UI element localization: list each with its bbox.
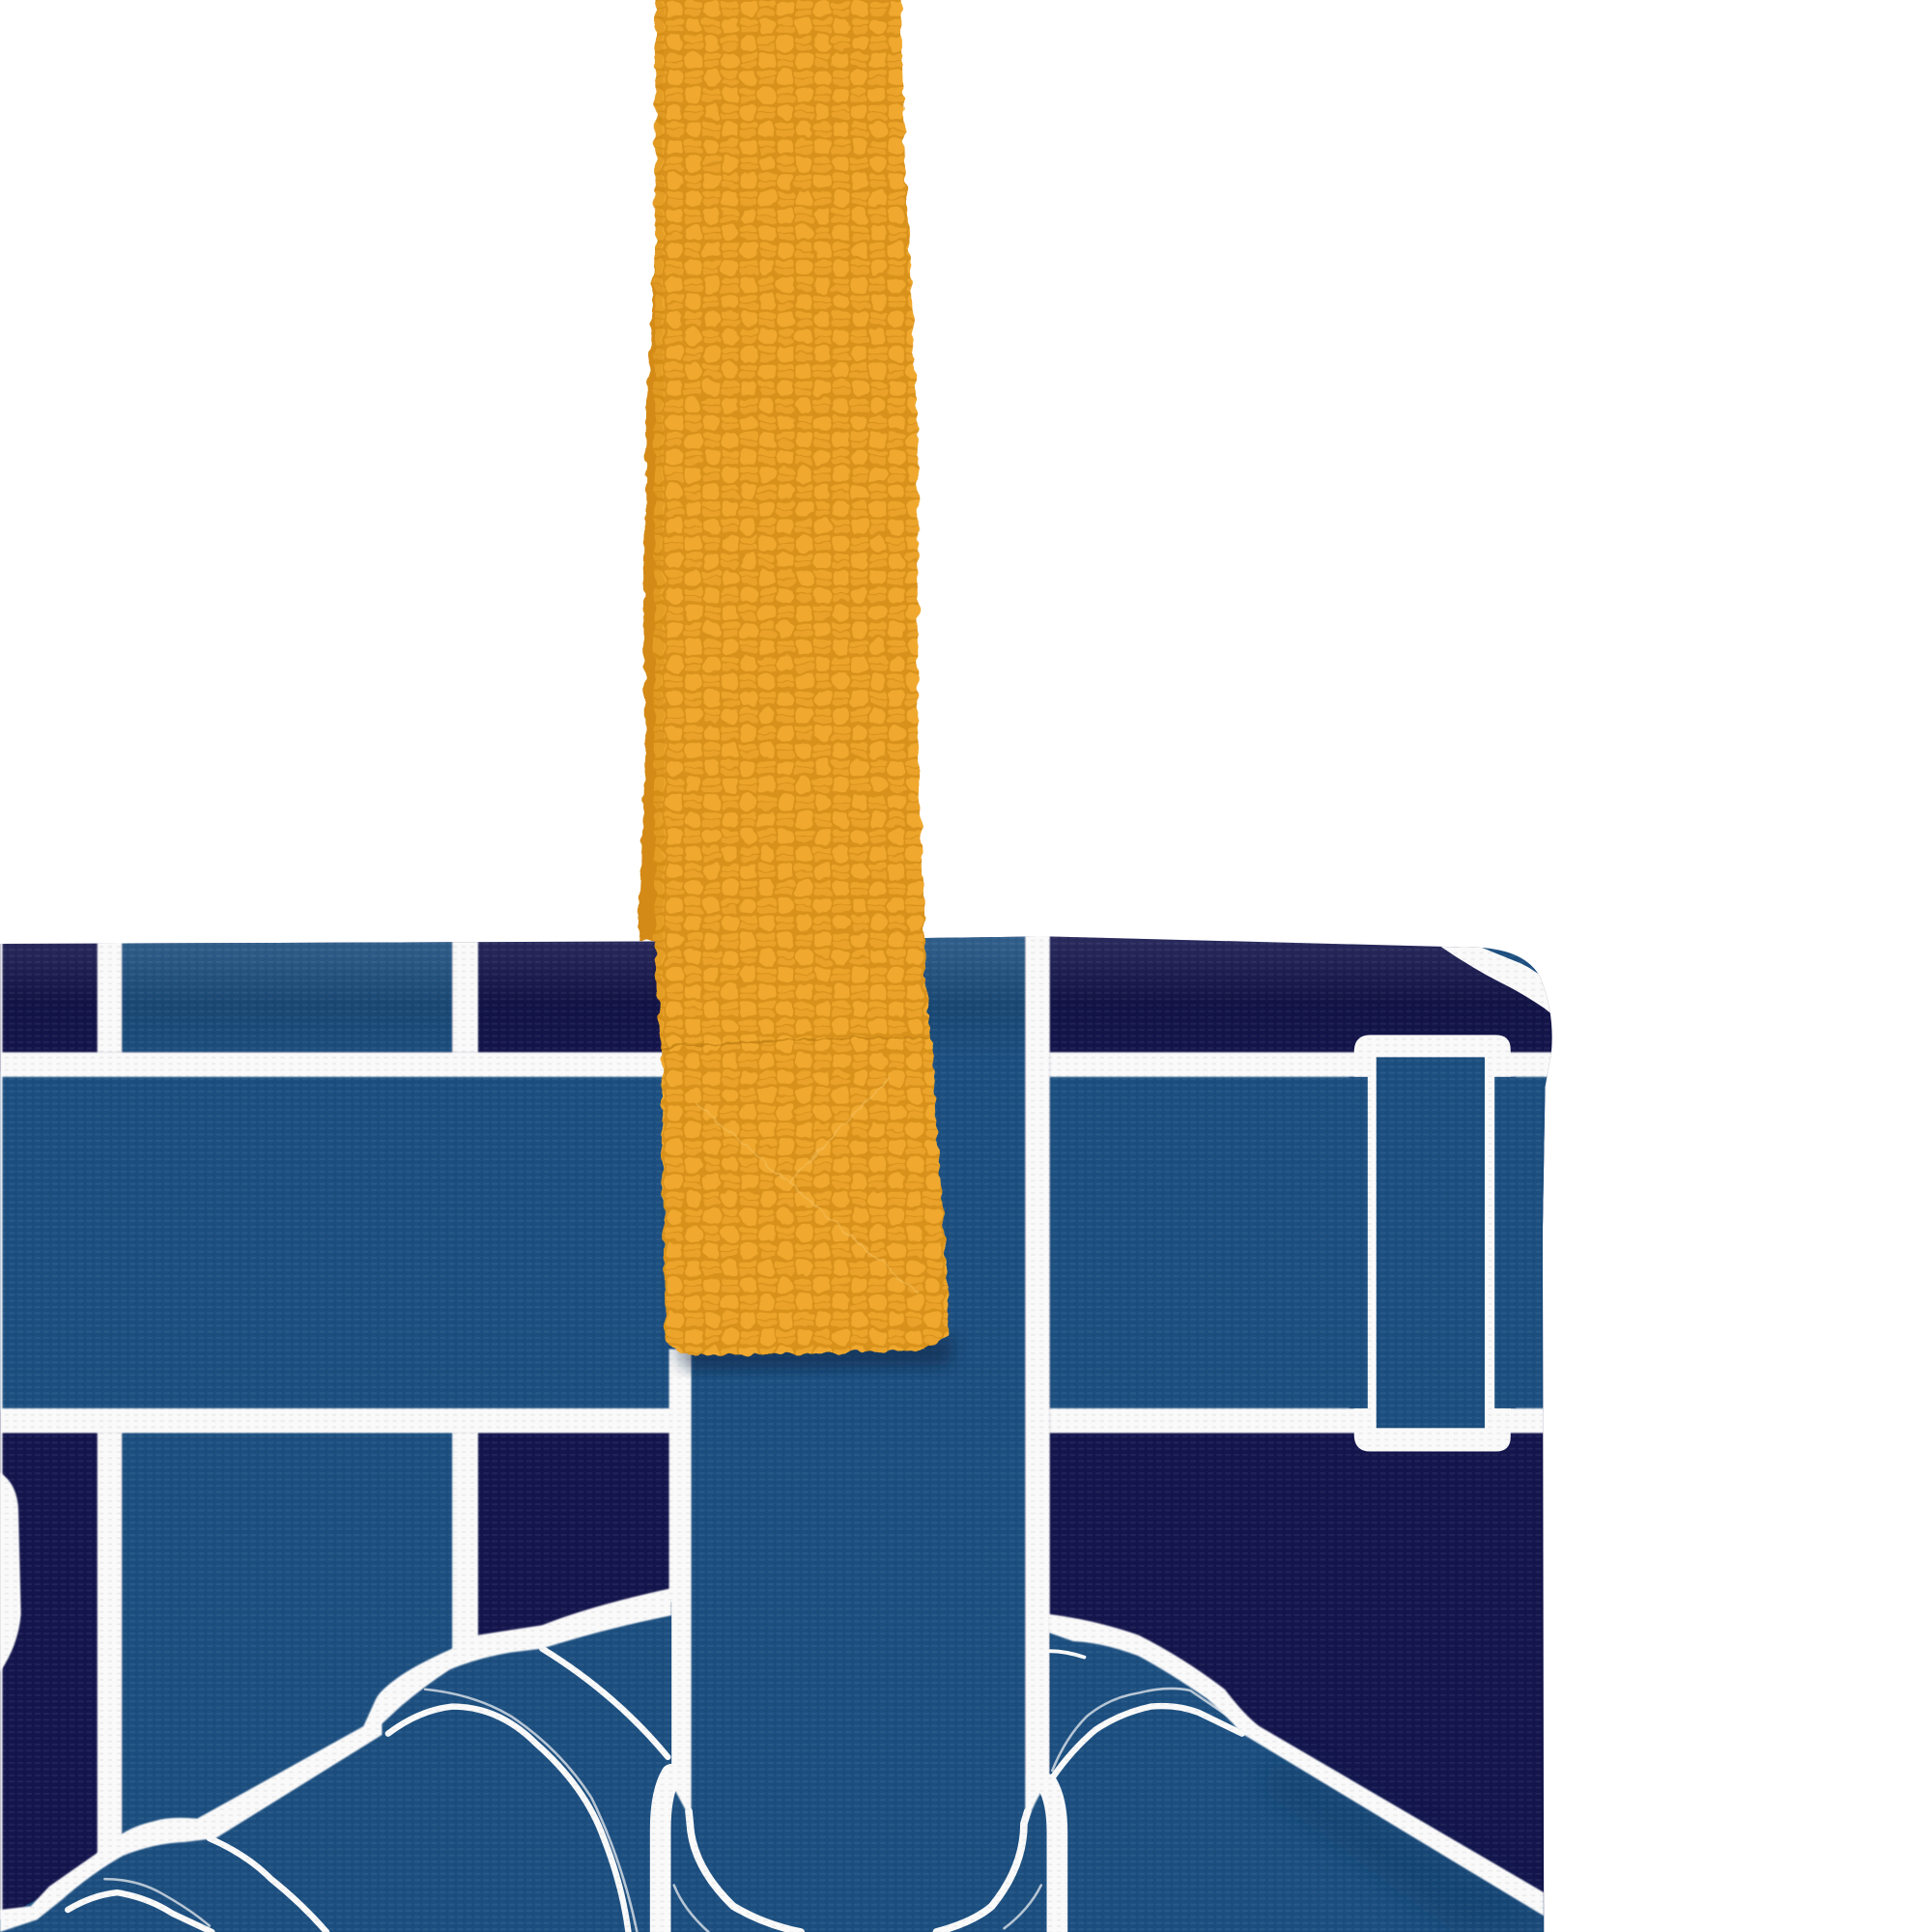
corner stripe <box>1440 947 1555 1016</box>
bag navy base <box>0 930 1559 1932</box>
right barrel shading <box>1275 1772 1544 1928</box>
white grid lines <box>0 930 1559 1932</box>
left binocular barrels fill <box>0 1602 671 1932</box>
left binocular outline <box>0 1588 671 1932</box>
right binocular outline <box>1048 1614 1544 1916</box>
center strap column outline <box>661 1775 1057 1932</box>
buckle tab <box>1350 1035 1516 1452</box>
strap fold shading <box>653 0 663 1060</box>
top edge shading <box>2 937 1490 1025</box>
strap front <box>652 0 950 1356</box>
mustard strap <box>635 0 967 1361</box>
right binocular barrels fill <box>1050 1633 1544 1932</box>
tote bag body <box>0 930 1559 1932</box>
binocular barrel lines <box>68 1649 1242 1932</box>
strap back layer <box>639 246 666 941</box>
fabric texture <box>0 930 1559 1932</box>
left white curved shape <box>0 1472 21 1672</box>
blue panels <box>0 930 1555 1932</box>
stitching <box>662 1037 930 1293</box>
strap shadow on bag <box>671 1337 955 1370</box>
